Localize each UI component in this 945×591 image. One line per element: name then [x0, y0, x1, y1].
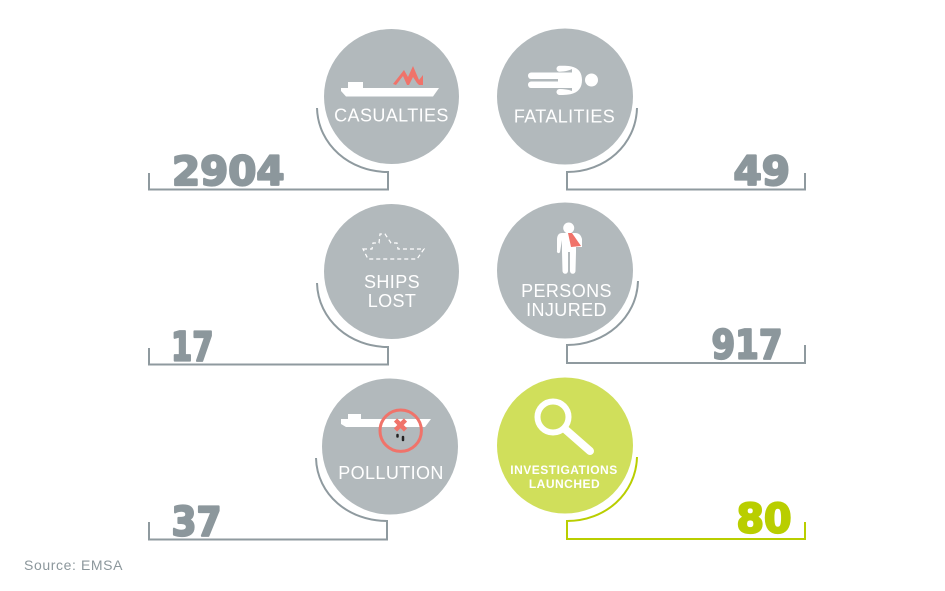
icon: magnifying glass [538, 402, 590, 451]
fatalities value: 49 [734, 149, 790, 195]
pollution label: POLLUTION [338, 463, 444, 483]
investigations value: 80 [736, 496, 792, 542]
investigations label: INVESTIGATIONS [510, 463, 618, 477]
ships lost value: 17 [171, 324, 214, 370]
persons injured label: INJURED [526, 300, 607, 320]
fatalities label: FATALITIES [514, 106, 615, 126]
casualties label: CASUALTIES [334, 106, 449, 126]
casualties value: 2904 [172, 149, 284, 195]
icon: dashed ship outline [363, 234, 424, 259]
investigations bracket line [567, 457, 805, 539]
fatalities bracket line [567, 108, 805, 190]
ships lost circle [324, 204, 459, 339]
persons injured circle [497, 202, 633, 338]
investigations label: LAUNCHED [529, 477, 600, 491]
pollution value: 37 [172, 500, 222, 546]
ships lost bracket line [149, 283, 388, 364]
panel: casualties [149, 29, 459, 195]
fatalities circle [497, 28, 633, 164]
investigations circle [497, 378, 633, 514]
casualties circle [324, 29, 459, 164]
investigations label [510, 463, 618, 491]
persons injured value: 917 [712, 322, 782, 368]
ships lost label [364, 272, 420, 311]
ships lost label: LOST [368, 291, 416, 311]
icon: lying person [528, 66, 598, 95]
persons injured label: PERSONS [521, 281, 612, 301]
panel: ships lost [149, 204, 459, 370]
panel: persons injured [497, 202, 805, 368]
pollution circle [322, 378, 458, 514]
ships lost label: SHIPS [364, 272, 420, 292]
icon: ship with oil leak [341, 410, 431, 451]
persons injured bracket line [567, 281, 805, 363]
casualties bracket line [149, 108, 388, 190]
panel: pollution [149, 378, 458, 546]
pollution bracket line [149, 458, 387, 540]
panel: fatalities [497, 28, 805, 195]
panel: investigations launched [497, 378, 805, 542]
source note: Source: EMSA [24, 557, 123, 573]
icon: ship with damage [341, 66, 439, 96]
icon: injured person with sling [557, 222, 582, 274]
persons injured label [521, 281, 612, 320]
